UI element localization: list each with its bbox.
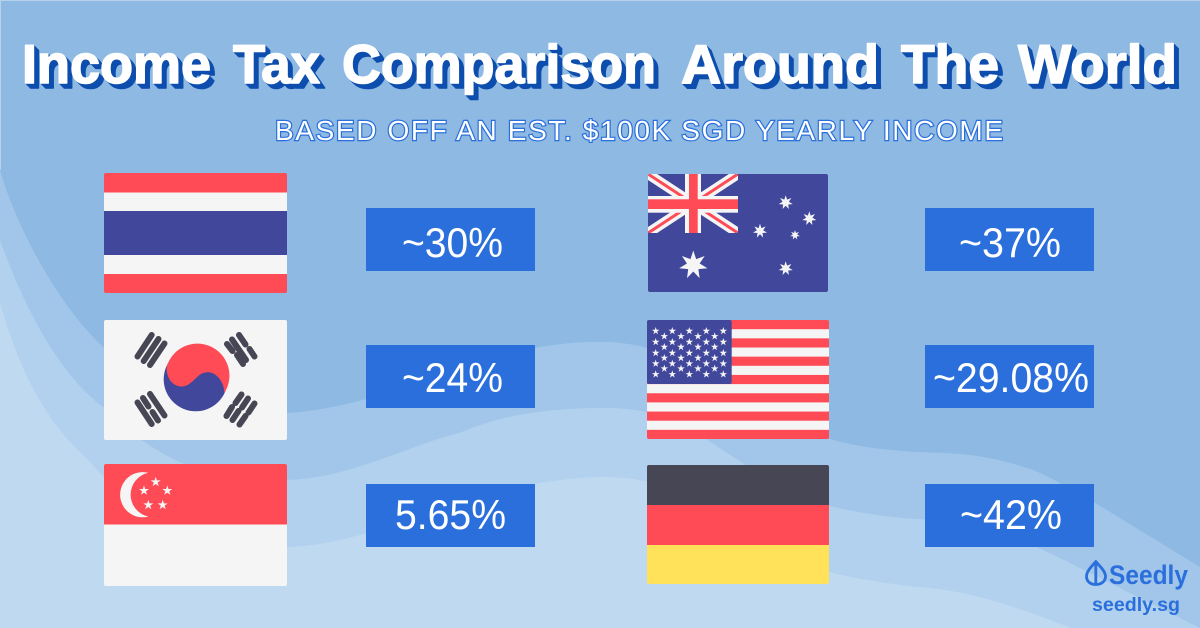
percentage: Thailand [366, 208, 535, 271]
Seedly logo: seedly.sg [1092, 595, 1180, 616]
Seedly logo [1086, 560, 1188, 616]
subtitle: BASED OFF AN EST. $100K SGD YEARLY INCOME [275, 115, 1003, 146]
title: The [901, 33, 999, 95]
flag: Thailand [104, 173, 287, 293]
percentage: South Korea: ~24% [402, 354, 503, 401]
flag: South Korea [104, 320, 287, 440]
icon: seed drop [1086, 562, 1106, 584]
flag: Singapore [104, 464, 287, 586]
percentage: United States: ~29.08% [933, 354, 1089, 401]
title: World [1018, 33, 1177, 95]
flag: Australia [648, 174, 828, 292]
percentage: Germany: ~42% [960, 491, 1062, 538]
percentage: Thailand: ~30% [402, 219, 503, 266]
percentage: Singapore [366, 484, 535, 547]
percentage: Singapore: 5.65% [395, 491, 506, 538]
title: Income [22, 33, 211, 95]
percentage: Australia [925, 208, 1094, 271]
title: Tax [233, 33, 320, 95]
percentage: United States [925, 345, 1094, 408]
percentage: Germany [925, 484, 1094, 547]
title: Around [681, 33, 879, 95]
percentage: Australia: ~37% [959, 219, 1061, 266]
Seedly logo: Seedly [1109, 560, 1188, 590]
flag: United States [647, 320, 829, 439]
flag: Germany [647, 465, 829, 584]
title [22, 33, 1177, 95]
title: Comparison [342, 33, 656, 95]
percentage: South Korea [366, 345, 535, 408]
